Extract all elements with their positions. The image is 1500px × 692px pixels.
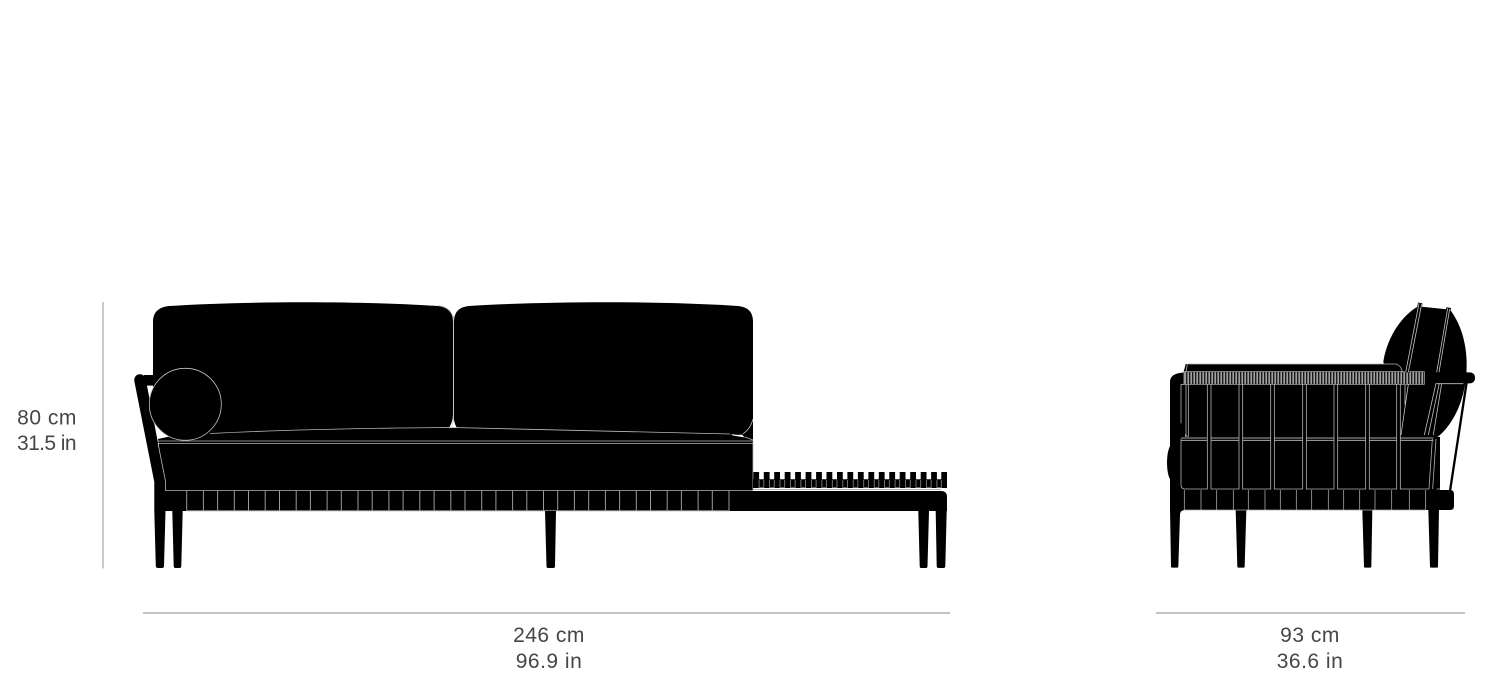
back cushion straps xyxy=(1407,303,1449,372)
webbing strips xyxy=(1184,490,1426,510)
seat seams xyxy=(158,419,753,491)
seat cushion xyxy=(158,428,753,491)
front left arm and leg xyxy=(134,374,166,568)
rope wrap xyxy=(1184,372,1424,384)
front view of daybed sofa xyxy=(134,302,947,568)
height dimension: line and label: 80 cm xyxy=(17,406,77,430)
wedge gap at cushion corner xyxy=(731,434,745,438)
seat body xyxy=(1181,382,1440,492)
bolster pillow xyxy=(149,368,221,440)
depth dimension: line and label xyxy=(1156,613,1465,673)
depth dimension: line and label: 93 cm xyxy=(1280,624,1340,647)
depth dimension: line and label: 36.6 in xyxy=(1277,650,1343,673)
back cushion left xyxy=(153,302,453,434)
lower rail xyxy=(1175,490,1454,510)
height dimension: line and label: 31.5 in xyxy=(17,432,77,455)
back cushion right xyxy=(454,302,753,442)
upper arm cushion xyxy=(1183,364,1402,373)
height dimension: line and label xyxy=(17,302,103,568)
width dimension: line and label: 246 cm xyxy=(513,624,585,647)
round back cushion xyxy=(1383,306,1467,438)
width dimension: line and label: 96.9 in xyxy=(516,650,582,673)
side view of sofa xyxy=(1167,303,1475,568)
lower rail xyxy=(155,491,947,511)
rear post and leg xyxy=(1170,372,1185,568)
webbing strips xyxy=(187,491,729,511)
legs xyxy=(172,511,947,568)
gap between back cushions xyxy=(451,420,457,428)
gap wedge xyxy=(1181,423,1186,437)
legs xyxy=(1236,510,1439,568)
cushion and strap outlines xyxy=(1181,364,1440,489)
seat seam band xyxy=(1181,438,1433,440)
side bump xyxy=(1167,444,1178,481)
frame stub behind arm xyxy=(144,375,154,386)
table slats xyxy=(753,472,947,488)
front support strut xyxy=(1450,382,1467,491)
width dimension: line and label xyxy=(143,613,950,673)
arm rest end xyxy=(1418,372,1475,383)
cushion seam xyxy=(438,306,454,428)
